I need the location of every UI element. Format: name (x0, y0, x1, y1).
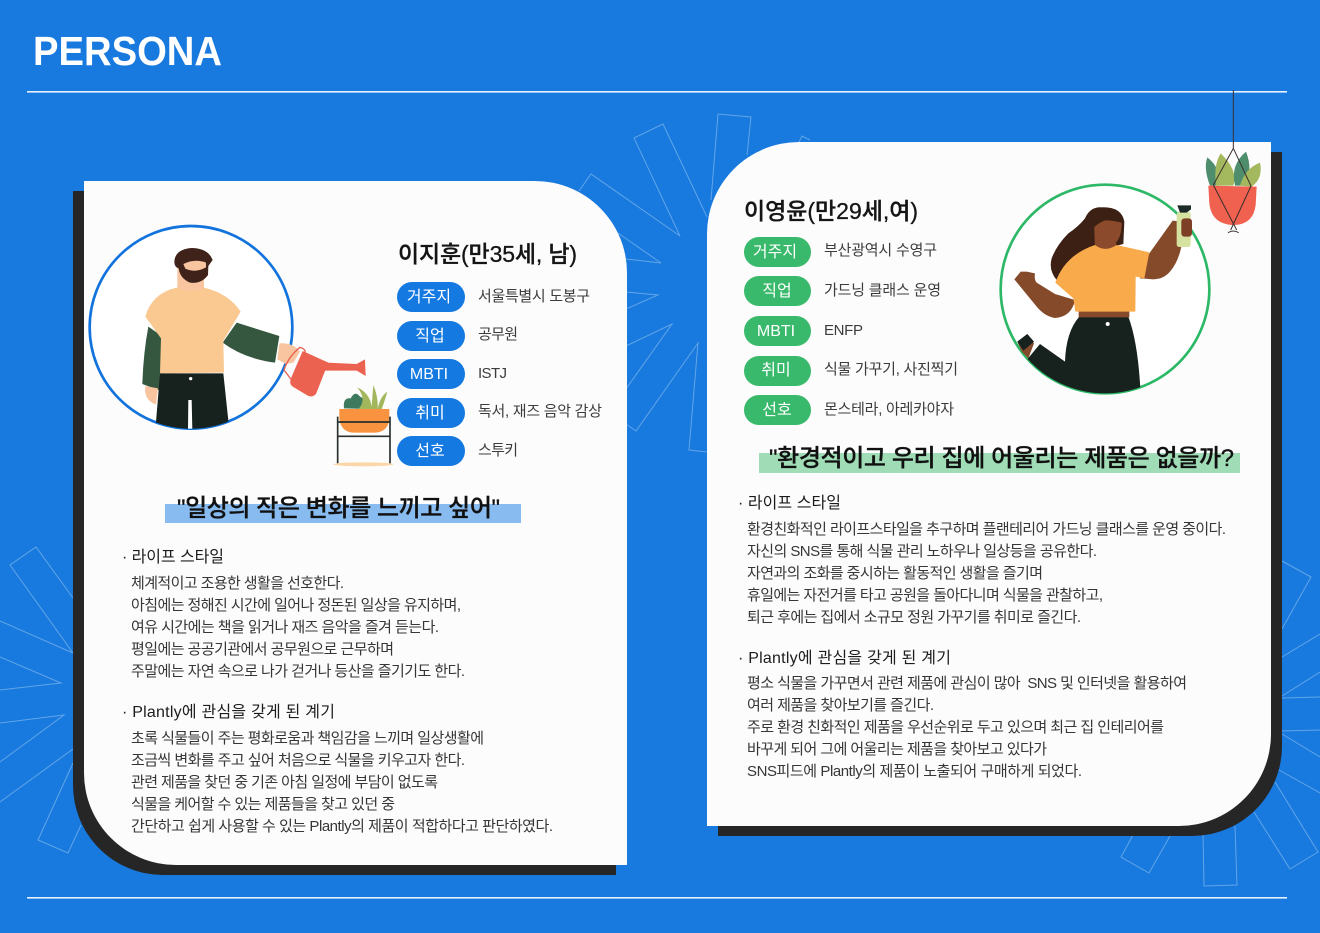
top rule (27, 91, 1287, 93)
profile rows: 거주지 (753, 243, 797, 261)
text block: motivation 2: 평소 식물을 가꾸면서 관련 제품에 관심이 많아 SNS 및 인터넷을 활용하여 (747, 675, 1187, 692)
panel 1 shadow (73, 191, 616, 875)
profile rows: 몬스테라, 아레카야자 (824, 401, 954, 418)
profile rows: 스투키 (478, 442, 518, 459)
text block: lifestyle 2: 환경친화적인 라이프스타일을 추구하며 플랜테리어 가드닝 클래스를 운영 중이다. (747, 521, 1226, 538)
text block: motivation 1: 관련 제품을 찾던 중 기존 아침 일정에 부담이 없도록 (131, 774, 438, 791)
text block: motivation 2 (738, 649, 1187, 780)
panel 1 card (84, 181, 627, 865)
portrait: man watering plant (90, 226, 393, 466)
name heading: 이영윤(만29세,여) (744, 198, 918, 224)
text block: motivation 2: 주로 환경 친화적인 제품을 우선순위로 두고 있으며 최근 집 인테리어를 (747, 719, 1164, 736)
text block: lifestyle 1 (122, 548, 465, 680)
text block: lifestyle 1: 체계적이고 조용한 생활을 선호한다. (131, 575, 344, 592)
profile rows: 직업 (762, 282, 792, 300)
profile rows: 부산광역시 수영구 (824, 242, 937, 259)
text block: lifestyle 1: 아침에는 정해진 시간에 일어나 정돈된 일상을 유지하며, (131, 597, 461, 614)
bottom rule (27, 897, 1287, 899)
text block: motivation 2: · Plantly에 관심을 갖게 된 계기 (738, 649, 951, 667)
profile rows: 가드닝 클래스 운영 (824, 282, 941, 299)
text block: motivation 1: · Plantly에 관심을 갖게 된 계기 (122, 703, 335, 721)
profile rows: ISTJ (478, 365, 507, 382)
panel: persona 1 (73, 181, 627, 875)
profile rows: 식물 가꾸기, 사진찍기 (824, 361, 958, 378)
text block: lifestyle 2 (738, 494, 1226, 626)
profile rows (744, 237, 958, 425)
text block: motivation 1: 초록 식물들이 주는 평화로움과 책임감을 느끼며 일상생활에 (131, 730, 484, 747)
profile rows: 직업 (415, 327, 445, 345)
portrait: woman with spray bottle and hanging plant (1001, 90, 1261, 395)
profile rows: 독서, 재즈 음악 감상 (478, 403, 602, 420)
profile rows (397, 282, 602, 466)
text block: motivation 2: SNS피드에 Plantly의 제품이 노출되어 구매하게 되었다. (747, 763, 1082, 780)
profile rows: 공무원 (478, 326, 518, 343)
text block: lifestyle 2: 휴일에는 자전거를 타고 공원을 돌아다니며 식물을 관찰하고, (747, 587, 1103, 604)
profile rows: MBTI (410, 366, 448, 383)
panel: persona 2 (707, 90, 1282, 836)
text block: motivation 1: 간단하고 쉽게 사용할 수 있는 Plantly의 제품이 적합하다고 판단하였다. (131, 818, 553, 835)
profile rows: ENFP (824, 322, 863, 339)
profile rows: MBTI (757, 323, 795, 340)
quote 2: "환경적이고 우리 집에 어울리는 제품은 없을까? (769, 445, 1234, 472)
text block: lifestyle 1: 여유 시간에는 책을 읽거나 재즈 음악을 즐겨 듣는다. (131, 619, 439, 636)
profile rows: 서울특별시 도봉구 (478, 288, 590, 305)
quote 1: "일상의 작은 변화를 느끼고 싶어" (177, 495, 500, 522)
panel 2 shadow (718, 152, 1282, 836)
text block: lifestyle 2: 자신의 SNS를 통해 식물 관리 노하우나 일상등을 공유한다. (747, 543, 1097, 560)
text block: motivation 2: 바꾸게 되어 그에 어울리는 제품을 찾아보고 있다가 (747, 741, 1047, 758)
text block: lifestyle 2: 퇴근 후에는 집에서 소규모 정원 가꾸기를 취미로 즐긴다. (747, 609, 1081, 626)
profile rows: 선호 (415, 442, 445, 460)
text block: lifestyle 1: 평일에는 공공기관에서 공무원으로 근무하며 (131, 641, 394, 658)
text block: motivation 1: 식물을 케어할 수 있는 제품들을 찾고 있던 중 (131, 796, 395, 813)
profile rows: 선호 (762, 401, 792, 419)
text block: lifestyle 2: 자연과의 조화를 중시하는 활동적인 생활을 즐기며 (747, 565, 1043, 582)
text block: motivation 1: 조금씩 변화를 주고 싶어 처음으로 식물을 키우고자 한다. (131, 752, 465, 769)
text block: motivation 1 (122, 703, 553, 835)
profile rows: 거주지 (407, 288, 451, 306)
profile rows: 취미 (761, 361, 791, 379)
profile rows: 취미 (415, 404, 445, 422)
panel 2 card (707, 142, 1271, 826)
text block: lifestyle 2: · 라이프 스타일 (738, 494, 841, 512)
name heading: 이지훈(만35세, 남) (398, 241, 577, 267)
text block: motivation 2: 여러 제품을 찾아보기를 즐긴다. (747, 697, 934, 714)
title: PERSONA (33, 28, 222, 74)
text block: lifestyle 1: 주말에는 자연 속으로 나가 걷거나 등산을 즐기기도 한다. (131, 663, 465, 680)
text block: lifestyle 1: · 라이프 스타일 (122, 548, 224, 566)
